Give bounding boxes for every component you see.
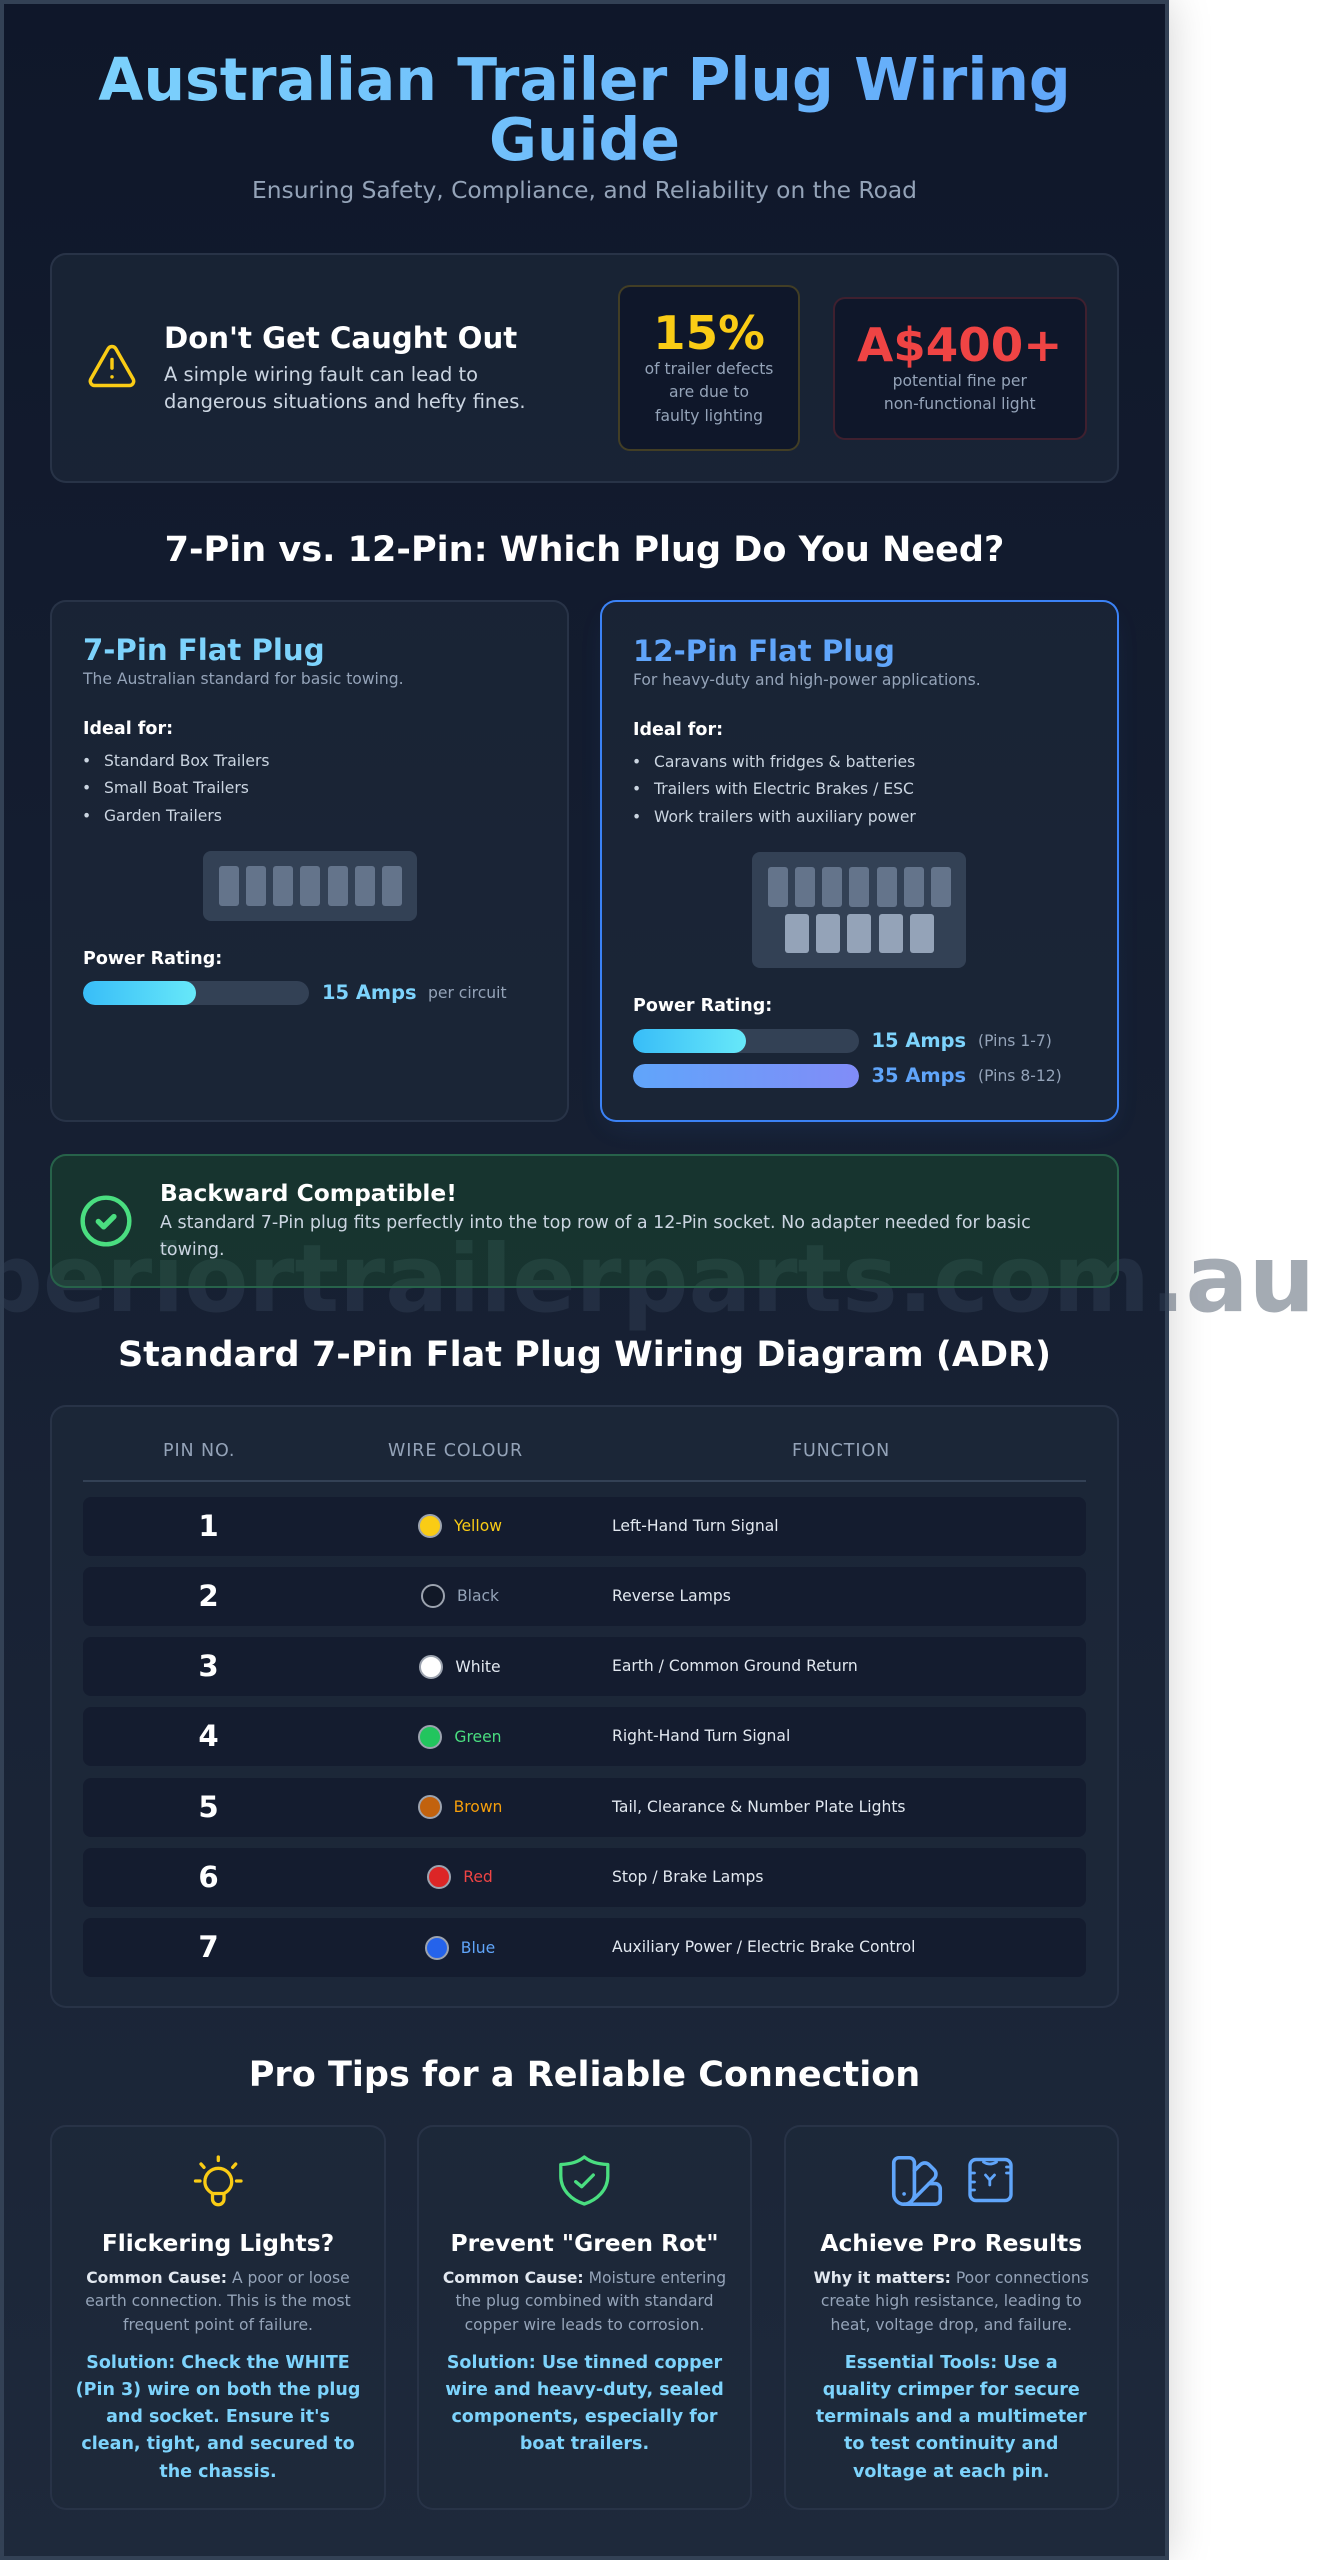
amps value: 35 Amps	[872, 1064, 966, 1087]
tip cause	[85, 2269, 351, 2334]
row: pin 1: 1	[198, 1508, 219, 1542]
row: pin 6: Red	[463, 1868, 493, 1886]
tip solution	[816, 2352, 1087, 2482]
stat caption: faulty lighting	[655, 406, 763, 424]
stat caption	[884, 372, 1036, 413]
row: pin 7	[83, 1918, 1086, 1977]
callout: backward compatible	[50, 1154, 1119, 1288]
tip cause: Why it matters: Poor connections	[814, 2269, 1089, 2287]
row: pin 7: Auxiliary Power / Electric Brake Control	[612, 1938, 915, 1956]
row: pin 7: Blue	[461, 1938, 495, 1956]
tip solution: wire and heavy-duty, sealed	[445, 2380, 724, 2400]
row: pin 2: 2	[198, 1579, 219, 1613]
tip title: Achieve Pro Results	[820, 2229, 1082, 2257]
title	[50, 50, 1119, 170]
row: pin 6	[83, 1848, 1086, 1907]
tip title: Prevent "Green Rot"	[450, 2229, 718, 2257]
tip solution: (Pin 3) wire on both the plug	[76, 2380, 360, 2400]
section heading: wiring diagram: Standard 7-Pin Flat Plug Wiring Diagram (ADR)	[118, 1334, 1051, 1375]
power rating label: Power Rating:	[83, 949, 222, 969]
panel: green rot tip	[417, 2125, 752, 2510]
stat: fine	[832, 297, 1087, 440]
tip cause: earth connection. This is the most	[85, 2292, 351, 2310]
tip solution	[445, 2352, 724, 2454]
callout text: A standard 7-Pin plug fits perfectly into the top row of a 12-Pin socket. No adapter needed for basic	[160, 1213, 1031, 1233]
card subtitle: The Australian standard for basic towing.	[83, 670, 404, 688]
stat caption: non-functional light	[884, 395, 1036, 413]
tip cause: copper wire leads to corrosion.	[465, 2316, 704, 2334]
list: ideal uses	[84, 752, 270, 825]
alert description: A simple wiring fault can lead to	[164, 363, 478, 386]
stat caption: are due to	[669, 383, 749, 401]
tip cause: Common Cause: Moisture entering	[443, 2269, 726, 2287]
list: ideal uses: Work trailers with auxiliary power	[654, 808, 916, 826]
tip title: Flickering Lights?	[102, 2229, 334, 2257]
row: pin 4: Green	[454, 1728, 502, 1746]
row: pin 5	[83, 1778, 1086, 1837]
stat: 15 percent	[618, 285, 800, 451]
icon: tools	[892, 2156, 1013, 2206]
list: ideal uses	[634, 753, 916, 826]
panel: alert and statistics	[50, 253, 1119, 483]
row: pin 3: Earth / Common Ground Return	[612, 1657, 858, 1675]
tip cause: the plug combined with standard	[455, 2292, 714, 2310]
card subtitle: For heavy-duty and high-power applications.	[633, 671, 981, 689]
stat caption	[645, 360, 773, 424]
amps value: 15 Amps	[322, 981, 417, 1004]
alert heading: Don't Get Caught Out	[164, 321, 517, 355]
column header: wire colour: WIRE COLOUR	[388, 1441, 523, 1461]
stat value: A$400+	[857, 319, 1062, 373]
title: Guide	[489, 106, 680, 174]
row: pin 5: 5	[198, 1790, 219, 1824]
row: pin 6: 6	[198, 1860, 219, 1894]
stat caption: of trailer defects	[645, 360, 773, 378]
amps note: (Pins 8-12)	[978, 1067, 1062, 1085]
power bar: pins 8-12	[633, 1064, 859, 1088]
stat caption: potential fine per	[893, 372, 1027, 390]
ideal for label: Ideal for:	[633, 720, 723, 740]
tip solution: voltage at each pin.	[853, 2462, 1050, 2482]
callout text	[160, 1213, 1031, 1260]
row: pin 3	[83, 1637, 1086, 1696]
list: ideal uses: Garden Trailers	[104, 807, 222, 825]
card title: 12-Pin Flat Plug	[633, 634, 895, 668]
row: pin 1: Yellow	[454, 1517, 502, 1535]
list: ideal uses: Trailers with Electric Brakes / ESC	[654, 780, 914, 798]
row: pin 4: 4	[198, 1719, 219, 1753]
panel: pro results tip	[784, 2125, 1119, 2510]
tip solution: components, especially for	[451, 2407, 718, 2427]
panel: flickering lights tip	[50, 2125, 386, 2510]
panel: wiring table	[50, 1405, 1119, 2008]
row: pin 5: Tail, Clearance & Number Plate Lights	[612, 1798, 906, 1816]
ideal for label: Ideal for:	[83, 718, 173, 738]
alert description: dangerous situations and hefty fines.	[164, 390, 526, 413]
panel: 12-pin plug	[600, 600, 1119, 1122]
tip solution: quality crimper for secure	[823, 2380, 1080, 2400]
list: ideal uses: Caravans with fridges & batteries	[654, 753, 915, 771]
stat value: 15%	[653, 307, 765, 361]
column header: function: FUNCTION	[792, 1441, 890, 1461]
plug diagram: 7 pins	[203, 851, 417, 921]
list: ideal uses: Standard Box Trailers	[104, 752, 270, 770]
panel: 7-pin plug	[50, 600, 568, 1122]
tip solution: clean, tight, and secured to	[81, 2434, 355, 2454]
row: pin 1	[83, 1496, 1086, 1556]
plug diagram: 12 pins	[752, 852, 966, 968]
row: pin 2: Black	[457, 1587, 499, 1605]
icon: light bulb	[194, 2155, 243, 2206]
row: pin 3: White	[455, 1658, 501, 1676]
row: pin 2: Reverse Lamps	[612, 1587, 731, 1605]
amps note: per circuit	[428, 984, 507, 1002]
column header: pin: PIN NO.	[163, 1441, 235, 1461]
icon: shield check	[559, 2155, 610, 2206]
tip cause: Common Cause: A poor or loose	[86, 2269, 350, 2287]
power rating label: Power Rating:	[633, 996, 772, 1016]
tip solution: the chassis.	[159, 2462, 277, 2482]
row: pin 7: 7	[198, 1930, 219, 1964]
tip solution: to test continuity and	[844, 2434, 1058, 2454]
title: Australian Trailer Plug Wiring	[98, 46, 1071, 114]
row: pin 5: Brown	[454, 1798, 502, 1816]
callout heading: Backward Compatible!	[160, 1179, 457, 1207]
power bar	[83, 981, 309, 1005]
tip cause: frequent point of failure.	[123, 2316, 313, 2334]
tip solution: Solution: Check the WHITE	[86, 2352, 350, 2372]
tip cause	[443, 2269, 726, 2334]
callout text: towing.	[160, 1240, 225, 1260]
row: pin 4: Right-Hand Turn Signal	[612, 1727, 790, 1745]
tip solution: terminals and a multimeter	[816, 2407, 1087, 2427]
tip solution: Essential Tools: Use a	[845, 2352, 1058, 2372]
power bar: pins 1-7	[633, 1029, 859, 1053]
amps value: 15 Amps	[872, 1029, 966, 1052]
row: pin 1: Left-Hand Turn Signal	[612, 1516, 779, 1534]
tip solution: boat trailers.	[520, 2434, 649, 2454]
section heading: pro tips: Pro Tips for a Reliable Connection	[249, 2054, 920, 2095]
list: ideal uses: Small Boat Trailers	[104, 779, 249, 797]
card title: 7-Pin Flat Plug	[83, 633, 325, 667]
alert description	[164, 363, 526, 413]
row: pin 2	[83, 1567, 1086, 1626]
tip cause: heat, voltage drop, and failure.	[830, 2316, 1072, 2334]
tip cause	[814, 2269, 1089, 2334]
tip solution: and socket. Ensure it's	[106, 2407, 330, 2427]
row: pin 6: Stop / Brake Lamps	[612, 1868, 763, 1886]
amps note: (Pins 1-7)	[978, 1032, 1052, 1050]
tip solution	[76, 2352, 360, 2482]
icon: check circle	[80, 1196, 132, 1246]
subtitle: Ensuring Safety, Compliance, and Reliability on the Road	[252, 176, 917, 204]
tip solution: Solution: Use tinned copper	[447, 2352, 722, 2372]
section heading: comparison: 7-Pin vs. 12-Pin: Which Plug Do You Need?	[165, 529, 1004, 570]
row: pin 4	[83, 1707, 1086, 1766]
icon: warning triangle	[88, 344, 136, 388]
row: pin 3: 3	[198, 1649, 219, 1683]
tip cause: create high resistance, leading to	[821, 2292, 1082, 2310]
